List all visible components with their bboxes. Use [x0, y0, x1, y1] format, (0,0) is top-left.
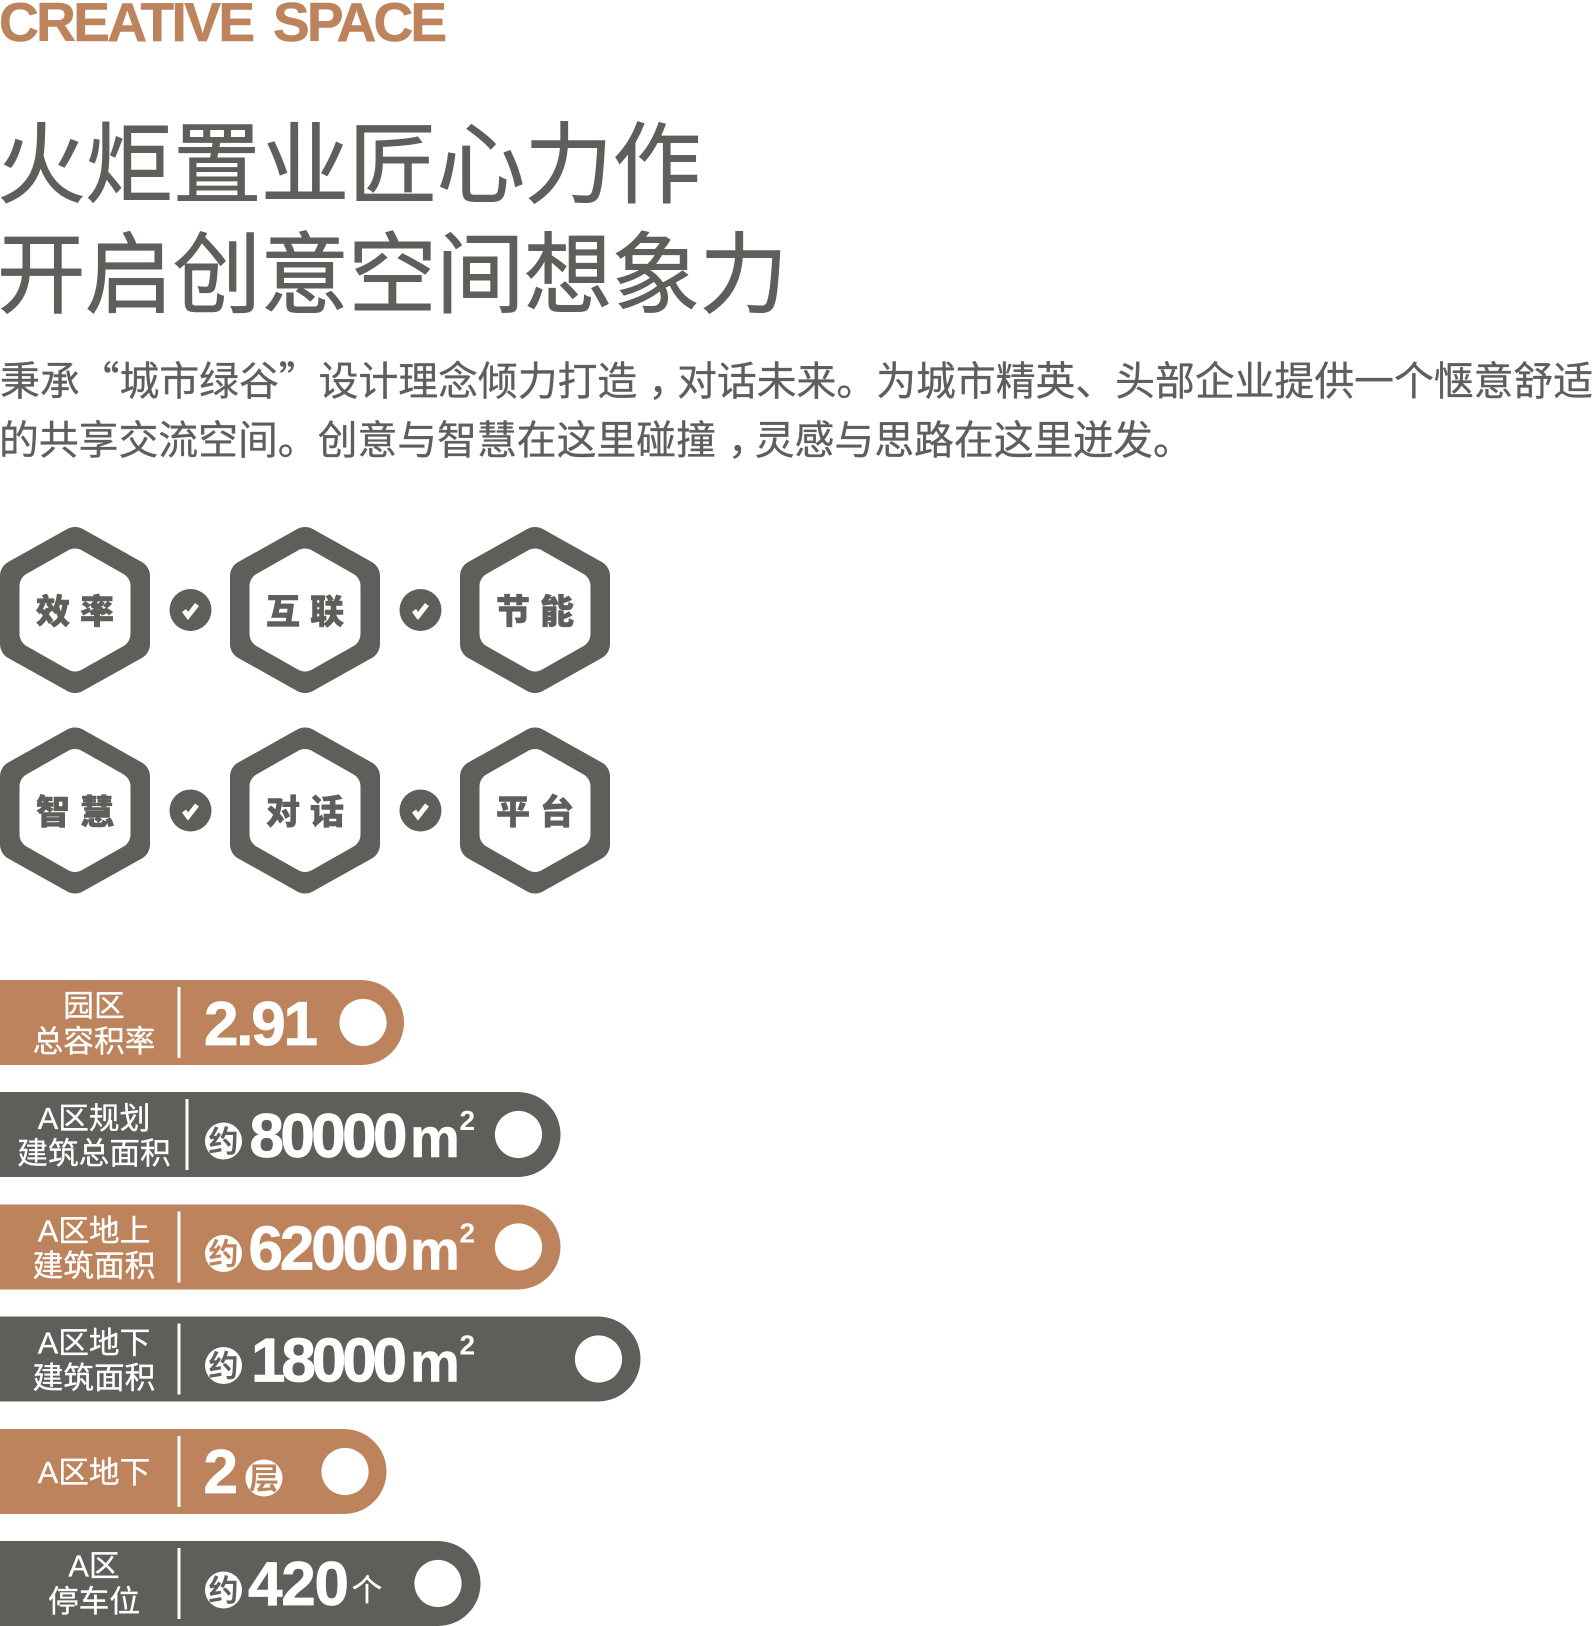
stat bar: A区地上建筑面积 62000: 2: [460, 1218, 475, 1248]
stat bar: A区规划建筑总面积 80000: [0, 1092, 560, 1177]
stat bar: 园区总容积率 2.91: 2.91: [204, 990, 318, 1059]
stat bar: A区地下建筑面积 18000: A区地下: [38, 1326, 150, 1360]
stat bar: A区地上建筑面积 62000: m: [410, 1218, 460, 1282]
check icon: [170, 790, 212, 832]
stat bar: A区地下 2层: 层: [249, 1454, 279, 1498]
stat bar: A区地上建筑面积 62000: A区地上: [38, 1214, 150, 1248]
hexagon: 效率: 率: [80, 584, 114, 634]
intro text block: 的共享交流空间。创意与智慧在这里碰撞 ，灵感与思路在这里迸发。: [0, 409, 1193, 466]
stat bar: A区停车位 420个: 约: [208, 1566, 238, 1610]
stat bar: A区停车位 420个: 个: [352, 1573, 382, 1608]
hexagon: 智慧: 慧: [80, 785, 114, 834]
hexagon: 效率: [16, 543, 134, 677]
stat bar: A区停车位 420个: 停车位: [48, 1584, 140, 1619]
heading: 火炬置业匠心力作: [0, 94, 701, 222]
stat bar: A区地上建筑面积 62000: 62000: [248, 1214, 408, 1284]
stat bar: A区停车位 420个: 420: [248, 1550, 349, 1619]
hexagon: 互联: [246, 543, 364, 677]
title: CREATIVE SPACE: [0, 0, 447, 53]
intro text block: [0, 350, 1593, 466]
hexagon: 节能: 节: [496, 584, 530, 634]
stat bar: A区地上建筑面积 62000: 约: [208, 1230, 238, 1274]
stat bar: A区地下 2层: A区地下: [38, 1455, 150, 1490]
stat bar: A区规划建筑总面积 80000: 约: [208, 1117, 238, 1161]
stat bar: A区地下建筑面积 18000: 2: [460, 1330, 475, 1360]
stat bar: A区规划建筑总面积 80000: 2: [460, 1105, 475, 1136]
stat bar: A区规划建筑总面积 80000: 80000: [250, 1102, 408, 1171]
hexagon: 互联: 互: [266, 584, 300, 634]
stat bar: 园区总容积率 2.91: 园区: [63, 988, 125, 1024]
stat bar: A区停车位 420个: [0, 1541, 480, 1626]
check icon: [400, 589, 442, 631]
hexagon: 对话: [246, 744, 364, 878]
hexagon: 平台: 台: [540, 785, 574, 834]
stat bar: A区地上建筑面积 62000: [0, 1204, 560, 1290]
stat bar: A区地下 2层: [0, 1429, 387, 1514]
stat bar: A区规划建筑总面积 80000: m: [410, 1106, 460, 1169]
hexagon: 智慧: [16, 744, 134, 878]
stat bar: A区停车位 420个: A区: [68, 1548, 120, 1584]
check icon: [170, 589, 212, 631]
check icon: [400, 790, 442, 832]
stat bar: A区地下建筑面积 18000: 约: [208, 1342, 238, 1386]
hexagon: 效率: 效: [36, 584, 70, 634]
heading: 开启创意空间想象力: [0, 204, 788, 332]
hexagon: 平台: [476, 744, 594, 878]
intro text block: 秉承“城市绿谷”设计理念倾力打造 ，对话未来。为城市精英、头部企业提供一个惬意舒适: [0, 350, 1593, 407]
stat bar: A区地下建筑面积 18000: 建筑面积: [33, 1360, 155, 1396]
stat bar: A区规划建筑总面积 80000: 建筑总面积: [17, 1136, 171, 1171]
stat bar: A区规划建筑总面积 80000: A区规划: [38, 1101, 150, 1136]
hexagon: 节能: 能: [540, 584, 574, 634]
hexagon: 对话: 话: [310, 785, 344, 834]
stat bar: A区地下建筑面积 18000: 18000: [251, 1326, 407, 1396]
stat bar: A区地下 2层: 2: [204, 1438, 238, 1507]
stat bar: 园区总容积率 2.91: 总容积率: [33, 1024, 155, 1059]
stat bar: A区地下建筑面积 18000: [0, 1316, 640, 1402]
hexagon: 对话: 对: [266, 785, 300, 834]
heading: [0, 94, 788, 332]
hexagon: 平台: 平: [496, 785, 530, 834]
stat bar: 园区总容积率 2.91: [0, 980, 404, 1065]
keyword hexagon grid: [16, 543, 594, 878]
stat bar: A区地上建筑面积 62000: 建筑面积: [33, 1248, 155, 1284]
hexagon: 智慧: 智: [36, 785, 70, 834]
hexagon: 互联: 联: [310, 584, 344, 634]
stat bar: A区地下建筑面积 18000: m: [410, 1330, 460, 1394]
hexagon: 节能: [476, 543, 594, 677]
